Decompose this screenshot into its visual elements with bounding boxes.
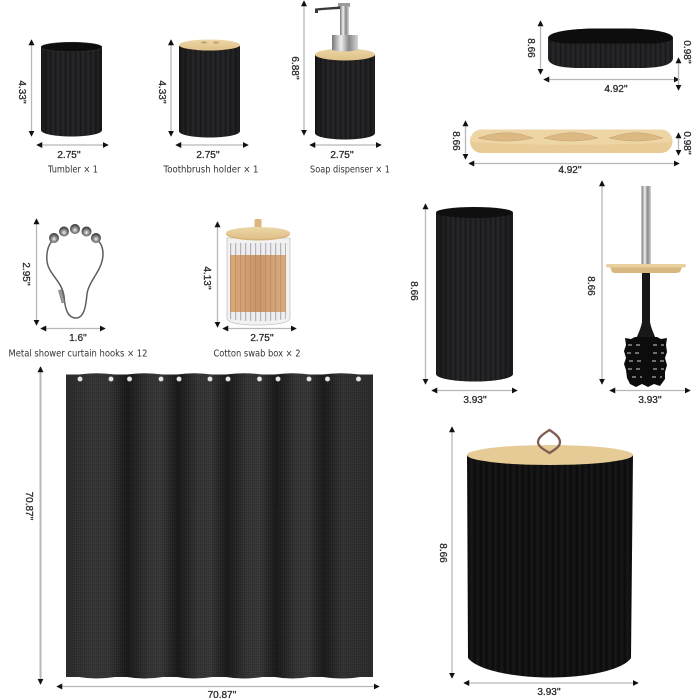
width dimension arrow xyxy=(469,162,679,164)
width dimension arrow xyxy=(176,144,248,146)
panel: toilet brush xyxy=(585,181,690,406)
panel: soap dispenser xyxy=(289,1,390,176)
height label: 8.66 xyxy=(450,131,461,151)
width label: 2.75'' xyxy=(57,150,81,161)
icon: tumbler cup xyxy=(41,42,102,137)
caption: Cotton swab box × 2 xyxy=(214,348,301,360)
depth label: 0.98'' xyxy=(681,131,692,155)
panel: storage bin xyxy=(437,427,638,698)
height dimension arrow xyxy=(30,40,32,136)
caption: Soap dispenser × 1 xyxy=(310,164,390,176)
height label: 8.66 xyxy=(525,38,536,58)
height label: 8.66 xyxy=(408,281,419,301)
width label: 3.93'' xyxy=(463,395,487,406)
depth label: 0.98'' xyxy=(681,40,692,64)
icon: tall cylinder xyxy=(436,207,513,382)
height dimension arrow xyxy=(540,21,542,74)
width label: 3.93'' xyxy=(638,395,662,406)
icon: toilet brush xyxy=(606,186,686,387)
curtain grommets xyxy=(78,376,361,382)
width dimension arrow xyxy=(37,144,108,146)
panel: wooden tray xyxy=(450,121,692,176)
height label: 4.33'' xyxy=(156,80,167,104)
width dimension arrow xyxy=(432,390,517,392)
width dimension arrow xyxy=(223,328,296,330)
height dimension arrow xyxy=(216,222,218,327)
height label: 70.87'' xyxy=(23,492,34,521)
icon: hook xyxy=(47,224,103,318)
width dimension arrow xyxy=(610,390,690,392)
height dimension arrow xyxy=(464,121,466,159)
height dimension arrow xyxy=(303,1,305,135)
height label: 8.66 xyxy=(437,543,448,563)
width label: 2.75'' xyxy=(330,150,354,161)
height label: 8.66 xyxy=(585,276,596,296)
width dimension arrow xyxy=(41,328,105,330)
icon: storage bin xyxy=(467,430,633,678)
caption: Metal shower curtain hooks × 12 xyxy=(8,348,148,360)
panel: shower curtain xyxy=(23,367,379,700)
height dimension arrow xyxy=(40,367,42,684)
height dimension arrow xyxy=(36,219,38,325)
width label: 2.75'' xyxy=(250,333,274,344)
depth dimension arrow xyxy=(678,58,680,90)
width dimension arrow xyxy=(310,144,381,146)
panel: soap dish xyxy=(525,21,692,95)
width dimension arrow xyxy=(57,686,379,688)
width label: 4.92'' xyxy=(558,165,582,176)
height dimension arrow xyxy=(170,40,172,136)
panel: cotton swab box xyxy=(201,219,301,360)
width dimension arrow xyxy=(464,682,638,684)
height label: 4.33'' xyxy=(16,80,27,104)
height label: 4.13'' xyxy=(201,266,212,290)
icon: toothbrush holder xyxy=(179,40,240,138)
width label: 2.75'' xyxy=(196,150,220,161)
panel: tall cylinder xyxy=(408,204,517,406)
panel: shower curtain hooks xyxy=(8,219,148,360)
icon: soap dispenser xyxy=(315,3,375,140)
icon: soap dish xyxy=(548,28,673,68)
height label: 6.88'' xyxy=(289,56,300,80)
height dimension arrow xyxy=(451,427,453,678)
caption: Toothbrush holder × 1 xyxy=(163,164,259,176)
caption: Tumbler × 1 xyxy=(47,164,98,176)
width label: 3.93'' xyxy=(537,687,561,698)
depth dimension arrow xyxy=(678,133,680,155)
icon: curtain xyxy=(66,373,373,678)
width dimension arrow xyxy=(544,78,679,80)
panel: tumbler xyxy=(16,40,108,176)
icon: wooden tray xyxy=(470,130,672,153)
height label: 2.95'' xyxy=(20,262,31,286)
icon: swab jar xyxy=(226,219,290,325)
width label: 1.6'' xyxy=(69,333,87,344)
height dimension arrow xyxy=(424,204,426,384)
panel: toothbrush holder xyxy=(156,40,259,176)
width label: 4.92'' xyxy=(604,84,628,95)
height dimension arrow xyxy=(601,181,603,384)
